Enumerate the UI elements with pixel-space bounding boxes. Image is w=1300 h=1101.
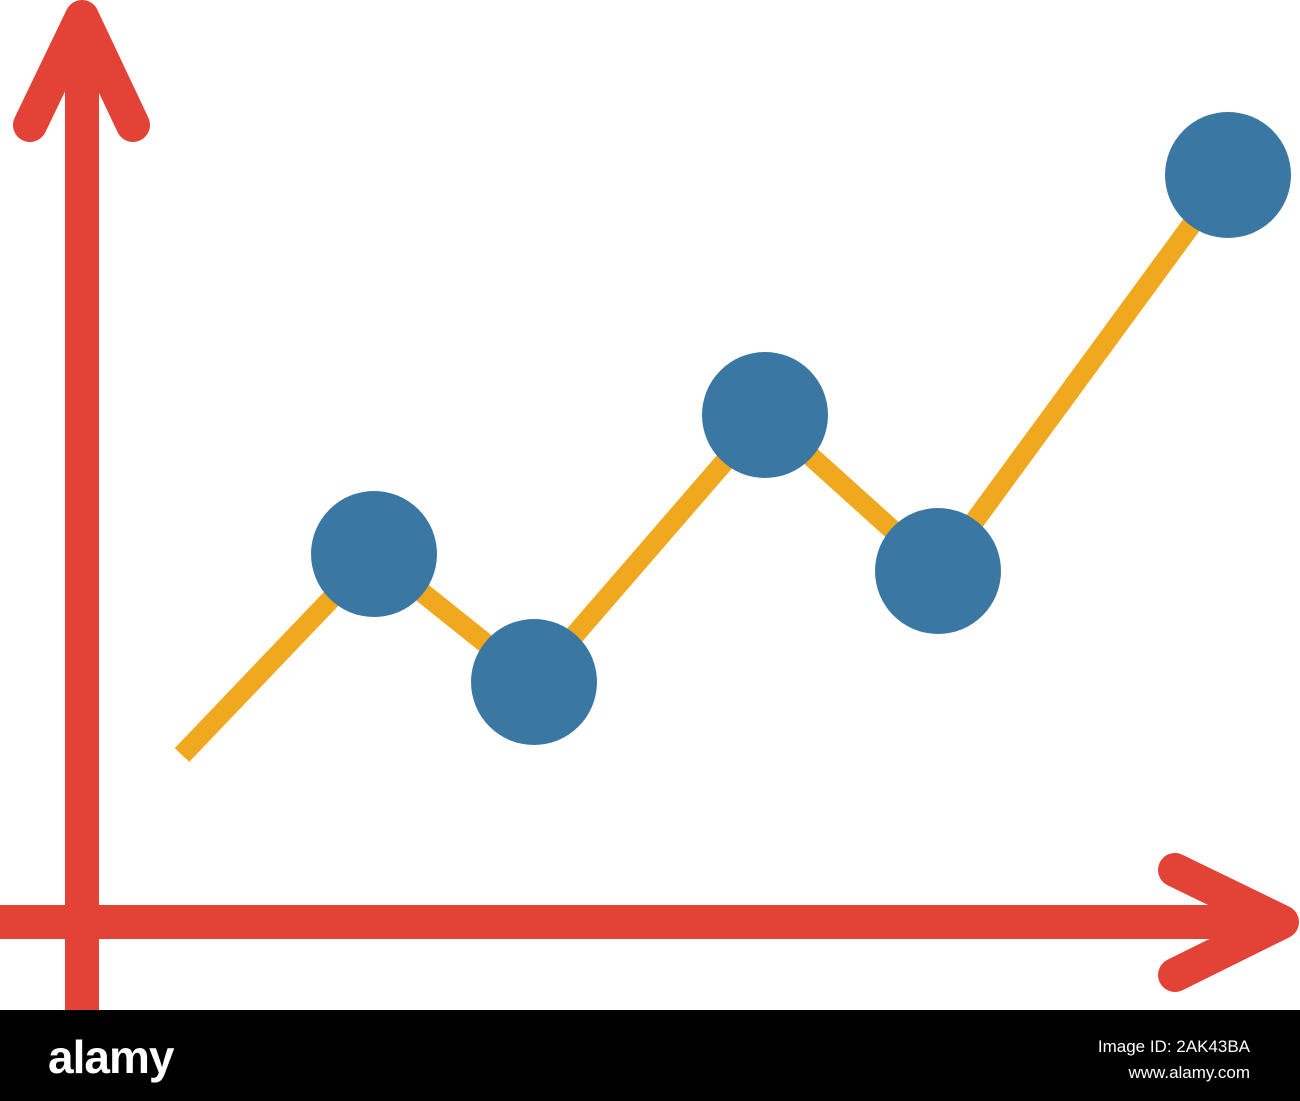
line series — [182, 112, 1291, 755]
vertical axis arrow — [30, 17, 133, 1030]
image id: www.alamy.com — [1128, 1063, 1250, 1082]
footer bar — [0, 1010, 1300, 1101]
logo: alamy — [48, 1031, 173, 1083]
horizontal axis arrow — [0, 870, 1282, 975]
image id: Image ID: 2AK43BA — [1098, 1037, 1250, 1056]
image id — [1098, 1037, 1250, 1082]
